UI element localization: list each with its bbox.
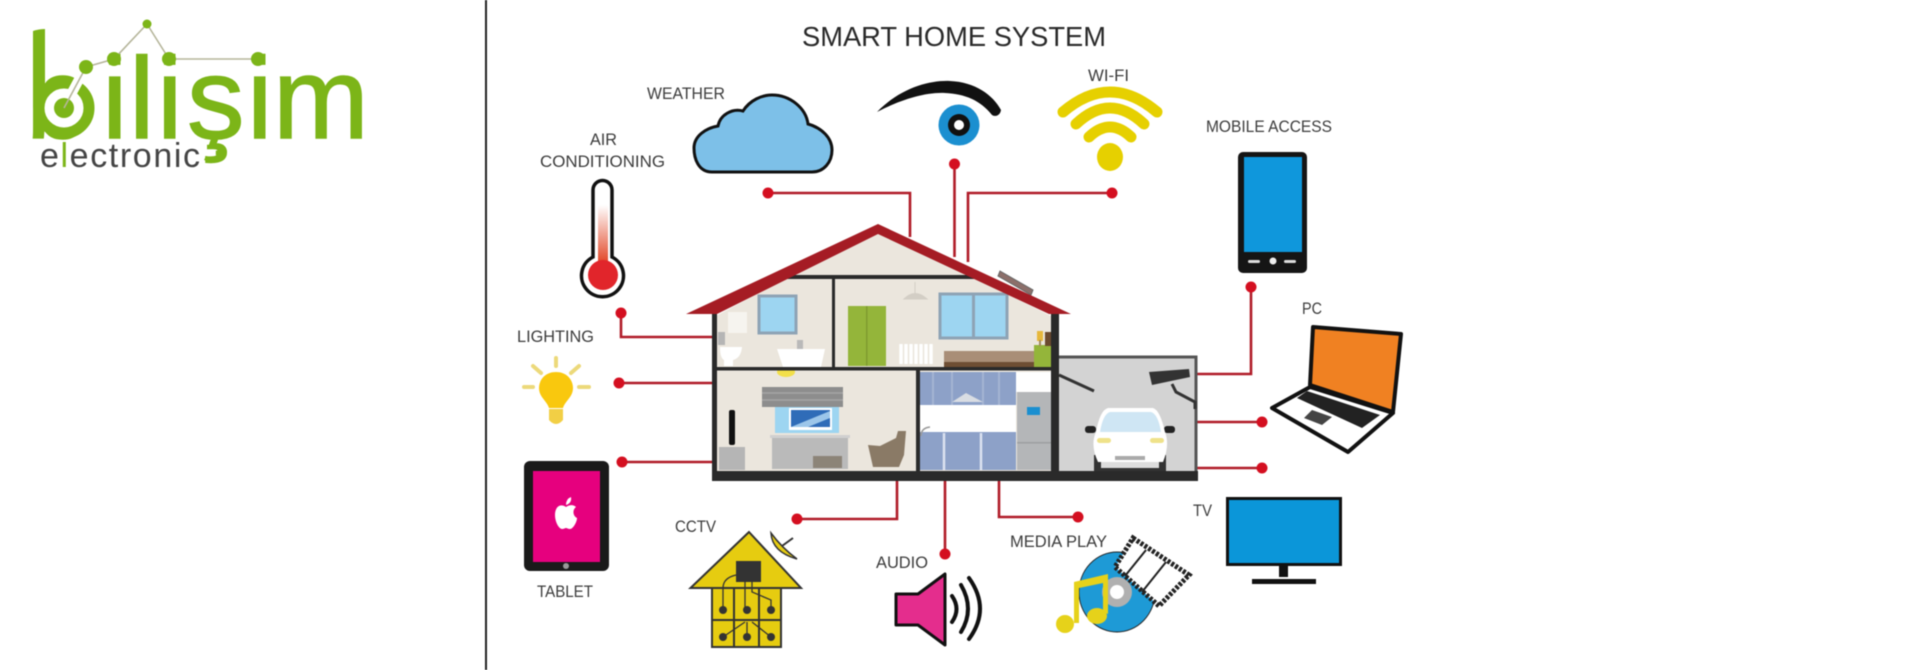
label: air conditioning: CONDITIONING: [540, 152, 665, 171]
icon: wi-fi: [1063, 92, 1157, 171]
bathroom: [718, 296, 825, 377]
label: air conditioning: [540, 130, 665, 171]
red roof: [686, 224, 1071, 314]
logo network nodes: [64, 20, 265, 108]
icon: audio speaker: [896, 574, 980, 645]
icon: media disc, film and music note: [1056, 538, 1189, 633]
logo: bilisim electronic: [26, 20, 369, 175]
icon: air conditioning thermometer: [582, 181, 624, 297]
vertical divider: [485, 0, 487, 670]
label: wi-fi: WI-FI: [1088, 66, 1129, 85]
icon: cctv house: [690, 532, 801, 647]
icon: light bulb: [524, 358, 589, 424]
logo wordmark: b: [26, 35, 90, 163]
logo subtitle: electronic: [40, 137, 200, 175]
living room: [719, 387, 906, 470]
label: media play: MEDIA PLAY: [1010, 532, 1107, 551]
car: [1085, 408, 1175, 471]
label: lighting: LIGHTING: [517, 327, 594, 346]
title: SMART HOME SYSTEM: [802, 21, 1106, 52]
icon: eye: [877, 81, 1001, 146]
house cross-section: [686, 224, 1198, 481]
logo wordmark: ilişim: [102, 35, 369, 163]
house structure walls: [712, 275, 1198, 481]
label: cctv: CCTV: [675, 517, 717, 536]
label: air conditioning: AIR: [590, 130, 617, 149]
kitchen: [919, 372, 1051, 470]
logo b mark: [33, 29, 89, 133]
label: mobile access: MOBILE ACCESS: [1206, 117, 1332, 136]
connector wires: [614, 158, 1268, 560]
icon: weather cloud: [694, 95, 832, 172]
label: audio: AUDIO: [876, 553, 928, 572]
label: tv: TV: [1193, 501, 1213, 520]
label: pc: PC: [1302, 299, 1322, 318]
label: weather: WEATHER: [647, 84, 725, 103]
garage: [1057, 357, 1196, 473]
label: tablet: TABLET: [537, 582, 593, 601]
icon: mobile phone: [1238, 152, 1307, 273]
logo cedilla tail: [205, 147, 224, 160]
icon: tv monitor: [1228, 498, 1340, 584]
house interior walls fill: [712, 230, 1055, 473]
bedroom: [848, 282, 1052, 367]
solar panel: [998, 271, 1033, 295]
icon: laptop: [1272, 327, 1401, 452]
icon: tablet: [524, 461, 609, 571]
